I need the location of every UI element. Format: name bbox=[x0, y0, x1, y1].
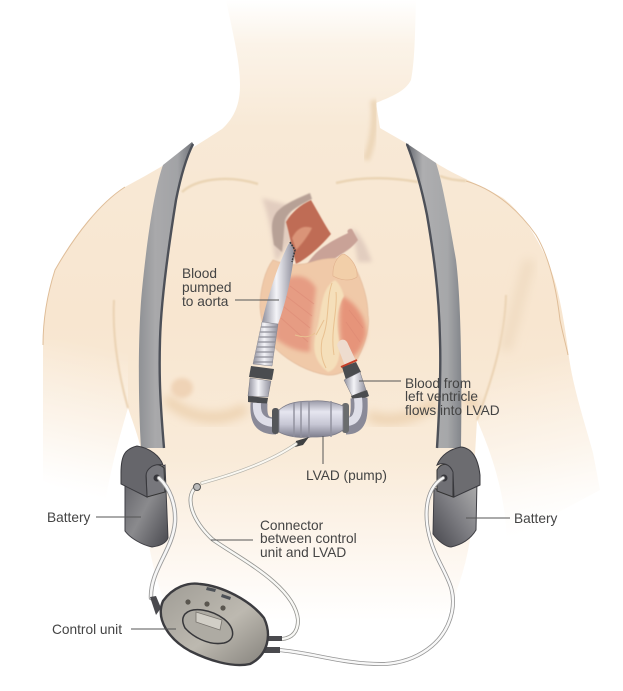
left ventricle muscle bbox=[275, 276, 316, 352]
outflow graft bbox=[262, 242, 294, 324]
label: LVAD pump: LVAD (pump) bbox=[306, 468, 387, 483]
label: connector: unit and LVAD bbox=[260, 545, 346, 560]
label: blood from left ventricle: left ventricle bbox=[405, 389, 478, 404]
LVAD pump assembly bbox=[248, 242, 369, 447]
collar bones bbox=[182, 176, 466, 192]
grey vessel bbox=[272, 193, 312, 252]
label: blood pumped to aorta: Blood bbox=[182, 266, 217, 281]
serrated tip bbox=[290, 242, 295, 262]
heart body bbox=[260, 258, 369, 375]
label: battery left: Battery bbox=[47, 510, 91, 525]
driveline connector bbox=[194, 484, 200, 490]
left elbow bbox=[259, 403, 276, 426]
neck shading bbox=[366, 100, 375, 160]
label: connector: between control bbox=[260, 531, 357, 546]
label: blood from left ventricle: Blood from bbox=[405, 376, 471, 391]
heart bbox=[260, 193, 372, 375]
pump body bbox=[279, 401, 343, 437]
left strap bbox=[139, 142, 194, 448]
driveline upper bbox=[202, 444, 296, 483]
vessel shadow bbox=[262, 198, 372, 262]
control unit bbox=[150, 584, 282, 665]
right strap dark edge bbox=[407, 144, 440, 448]
body outline hints bbox=[43, 181, 568, 355]
left arm fade bbox=[40, 340, 128, 520]
flanges bbox=[272, 408, 279, 434]
battery cable right bbox=[278, 478, 453, 664]
aorta highlight bbox=[292, 227, 312, 250]
right strap bbox=[406, 143, 461, 448]
left battery pouch bbox=[121, 446, 168, 547]
fat band bbox=[314, 280, 344, 372]
corrugated section bbox=[253, 322, 278, 366]
cables bbox=[151, 444, 453, 664]
aorta bbox=[286, 200, 331, 264]
nipple bbox=[171, 378, 193, 398]
left strap dark edge bbox=[160, 144, 193, 448]
label: blood pumped to aorta: to aorta bbox=[182, 294, 229, 309]
driveline lower bbox=[191, 489, 298, 639]
right arm fade bbox=[477, 345, 600, 540]
label: blood from left ventricle: flows into LVAD bbox=[405, 403, 500, 418]
right elbow bbox=[346, 398, 359, 426]
label: connector: Connector bbox=[260, 518, 324, 533]
label: battery right: Battery bbox=[514, 511, 558, 526]
driveline port bbox=[295, 437, 309, 447]
right collar bbox=[342, 362, 361, 380]
right battery pouch bbox=[433, 447, 480, 547]
label: control unit: Control unit bbox=[52, 622, 122, 637]
leader lines bbox=[96, 300, 510, 629]
right ventricle muscle bbox=[340, 296, 366, 358]
inflow cannula bbox=[337, 340, 356, 366]
pulmonary vessel bbox=[306, 229, 358, 272]
muscle streaks bbox=[281, 286, 363, 342]
label: blood pumped to aorta: pumped bbox=[182, 280, 231, 295]
display bbox=[183, 610, 233, 644]
battery cable left bbox=[151, 478, 175, 598]
left atrial appendage bbox=[333, 254, 357, 280]
armpit creases bbox=[114, 295, 506, 420]
left collar bbox=[249, 366, 274, 380]
chest shading bbox=[166, 396, 478, 420]
veins bbox=[295, 283, 336, 368]
